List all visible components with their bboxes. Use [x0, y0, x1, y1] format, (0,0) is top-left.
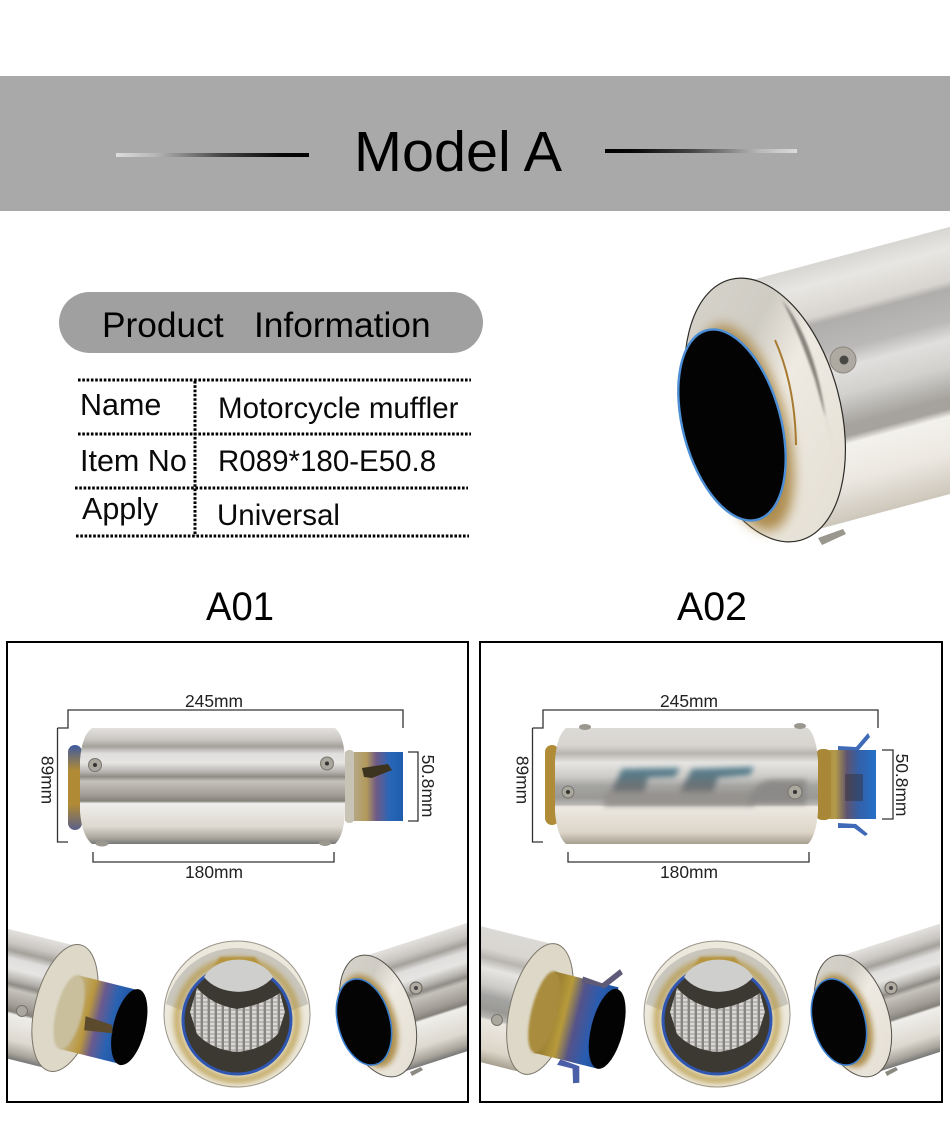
title text: Model A [354, 120, 562, 184]
row: item number: R089*180-E50.8 [218, 445, 436, 478]
heading A02: A02 [677, 585, 747, 629]
row: name: Name [80, 388, 161, 422]
A02 dimension: outlet diameter: 50.8mm [892, 754, 912, 816]
panel: A02 [436, 642, 950, 1102]
left title line [116, 153, 309, 157]
A01 dimension lines [58, 710, 418, 862]
A02 dimension: overall length: 245mm [660, 691, 718, 711]
A02 dimension: body diameter: 89mm [512, 756, 532, 804]
row: name: Motorcycle muffler [218, 392, 459, 425]
A01 dimension: body diameter: 89mm [38, 756, 58, 804]
A02 view: inlet angle [481, 926, 626, 1084]
A01 view: outlet angle [336, 923, 467, 1078]
product information heading [59, 292, 483, 353]
A01 dimension: body length: 180mm [185, 862, 243, 882]
A02 view: front interior [644, 941, 790, 1087]
panel: A01 [6, 641, 469, 1103]
row: item number: Item No [80, 444, 187, 478]
A02 dimension lines [532, 710, 893, 862]
A01 dimension: overall length: 245mm [185, 691, 243, 711]
right title line [605, 149, 797, 153]
A02 dimension: body length: 180mm [660, 862, 718, 882]
product information table [75, 380, 471, 536]
product information heading: Information [254, 306, 431, 345]
row: apply [82, 492, 340, 532]
row: item number [80, 444, 436, 478]
A01 muffler side view [68, 728, 403, 846]
title banner [0, 76, 950, 211]
A01 view: inlet angle [8, 929, 148, 1072]
product information heading: Product [102, 306, 224, 345]
row: apply: Universal [217, 499, 340, 532]
row: name [80, 388, 459, 425]
blurred logo on muffler [604, 767, 754, 806]
row: apply: Apply [82, 492, 159, 526]
A02 view: outlet angle [810, 924, 940, 1078]
A01 dimension: outlet diameter: 50.8mm [418, 755, 438, 817]
hero photo: muffler outlet close-up [658, 212, 950, 560]
A01 view: front interior [164, 941, 310, 1087]
A02 muffler side view [545, 723, 876, 844]
heading A01: A01 [206, 585, 274, 629]
